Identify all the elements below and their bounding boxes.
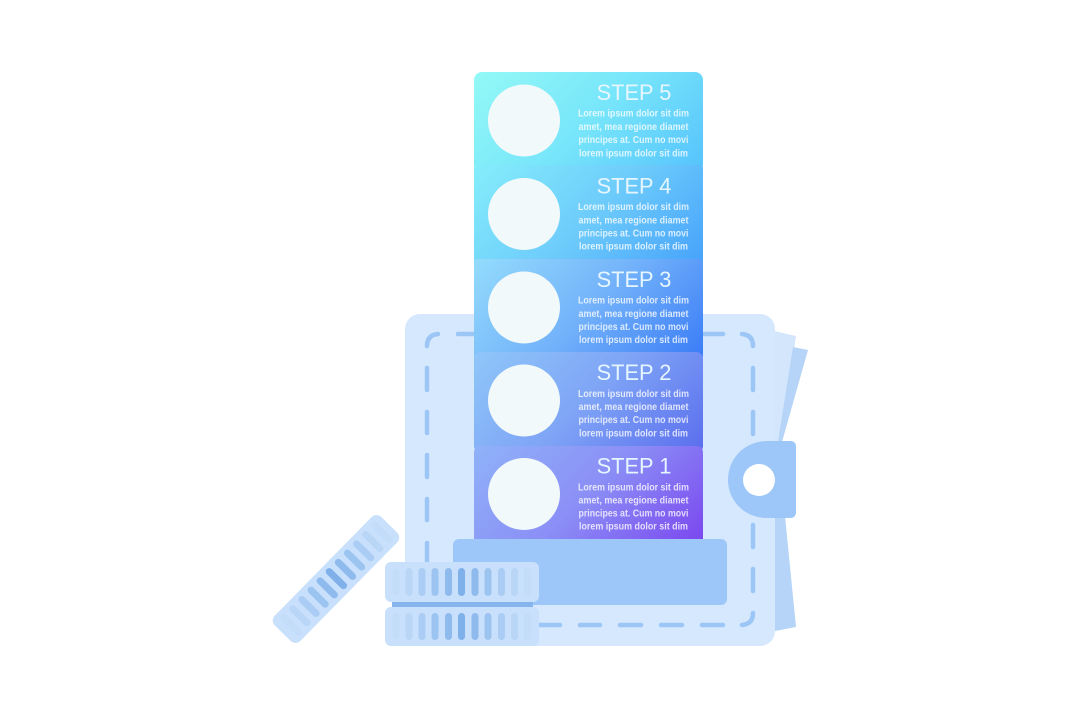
step 4 heading: STEP 4 <box>597 174 671 198</box>
coin stack: spacer between coins <box>392 601 533 608</box>
step 4 circle <box>488 178 560 250</box>
step 5 circle <box>488 84 560 156</box>
step 3 text: Lorem ipsum dolor sit dim <box>578 294 689 306</box>
step card 4 <box>474 165 703 266</box>
step card 2 <box>474 352 703 453</box>
clasp hole <box>743 464 775 496</box>
step 3 text <box>578 294 689 346</box>
step 1 text: principes at. Cum no movi <box>578 508 689 520</box>
step 2 text: principes at. Cum no movi <box>578 414 689 426</box>
step 3 heading: STEP 3 <box>597 267 671 292</box>
wallet paper: back sheet top <box>770 330 796 442</box>
step 2 circle <box>488 364 560 436</box>
wallet clasp <box>728 441 796 518</box>
step 4 text: lorem ipsum dolor sit dim <box>579 240 688 252</box>
step 1 text: lorem ipsum dolor sit dim <box>579 520 688 532</box>
step 1 text: amet, mea regione diamet <box>578 494 689 506</box>
step 2 heading: STEP 2 <box>597 360 671 385</box>
step 2 text <box>578 388 689 440</box>
step 4 text: amet, mea regione diamet <box>578 214 689 226</box>
wallet pocket <box>453 539 727 605</box>
step 5 heading: STEP 5 <box>597 80 671 105</box>
coin stack: bottom coin <box>385 607 539 646</box>
step 5 text: lorem ipsum dolor sit dim <box>579 148 688 160</box>
step 3 circle <box>488 272 560 344</box>
step 5 text: Lorem ipsum dolor sit dim <box>578 108 689 120</box>
step 2 text: amet, mea regione diamet <box>578 401 689 413</box>
step 3 text: lorem ipsum dolor sit dim <box>579 334 688 346</box>
step 5 text: principes at. Cum no movi <box>578 134 689 146</box>
step 4 text: principes at. Cum no movi <box>578 228 689 240</box>
step 4 text: Lorem ipsum dolor sit dim <box>578 201 689 213</box>
step 1 text <box>578 482 689 532</box>
step card 1 <box>474 446 703 545</box>
wallet paper: lower sheet <box>770 516 796 632</box>
step 1 text: Lorem ipsum dolor sit dim <box>578 482 689 494</box>
step 5 text: amet, mea regione diamet <box>578 121 689 133</box>
step 1 circle <box>488 458 560 530</box>
step 5 text <box>578 108 689 160</box>
step 2 text: Lorem ipsum dolor sit dim <box>578 388 689 400</box>
step 3 text: amet, mea regione diamet <box>578 308 689 320</box>
step card 5 <box>474 72 703 172</box>
step 2 text: lorem ipsum dolor sit dim <box>579 428 688 440</box>
step 3 text: principes at. Cum no movi <box>578 321 689 333</box>
step 1 heading: STEP 1 <box>597 454 671 478</box>
step card 3 <box>474 259 703 359</box>
step 4 text <box>578 201 689 252</box>
wallet body <box>405 314 775 646</box>
wallet stitching <box>427 334 753 625</box>
wallet paper: front sheet top <box>778 347 808 442</box>
coin stack: top coin <box>385 562 539 602</box>
tilted coin <box>270 512 402 646</box>
